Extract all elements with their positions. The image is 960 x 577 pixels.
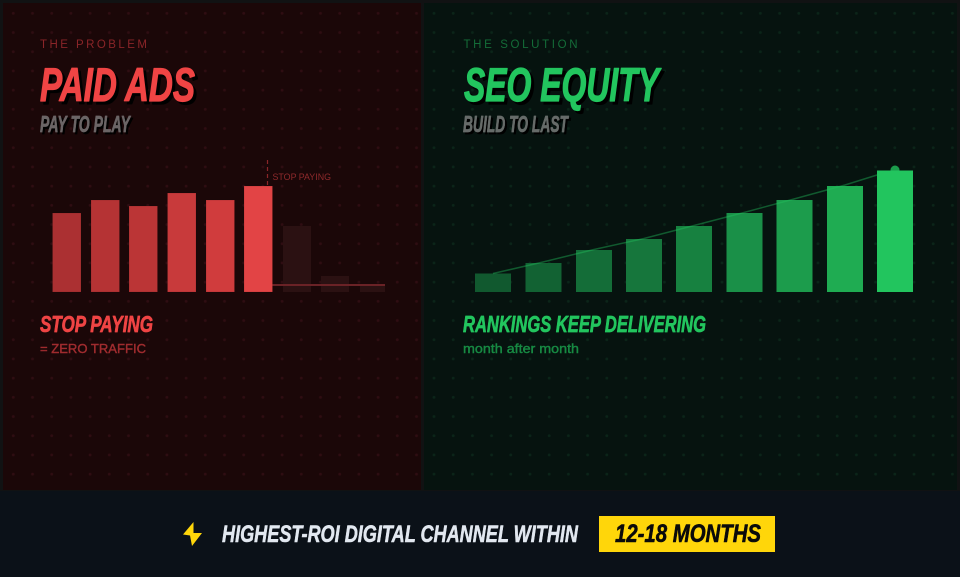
banner text: HIGHEST-ROI DIGITAL CHANNEL WITHIN	[222, 521, 579, 548]
bar chart: paid traffic collapses	[52, 160, 385, 292]
stop paying label: STOP PAYING	[272, 172, 331, 183]
caption: zero traffic: = ZERO TRAFFIC	[40, 341, 146, 356]
growth trend line	[493, 175, 877, 274]
subheading: pay to play: PAY TO PLAY	[40, 111, 132, 137]
bar chart: seo growth	[475, 166, 913, 292]
heading: seo equity: SEO EQUITY	[467, 61, 664, 114]
bars	[475, 170, 913, 292]
heading: paid ads	[40, 58, 198, 114]
icon: lightning bolt	[183, 522, 202, 546]
bars after stopping	[283, 226, 385, 292]
callout: rankings keep delivering: RANKINGS KEEP DELIVERING	[463, 311, 706, 337]
panel: the problem	[3, 3, 421, 490]
heading: paid ads: PAID ADS	[43, 61, 198, 114]
panel: the solution	[424, 3, 957, 490]
heading: paid ads: PAID ADS	[40, 58, 195, 111]
banner: bottom bar	[0, 491, 960, 577]
caption: month after month: month after month	[463, 341, 579, 356]
badge: 12-18 months: 12-18 MONTHS	[615, 520, 761, 548]
stop marker	[266, 160, 268, 186]
subheading: pay to play	[40, 111, 134, 139]
zero traffic line	[272, 284, 385, 286]
heading: seo equity: SEO EQUITY	[464, 58, 661, 111]
peak dot	[890, 166, 900, 174]
eyebrow: the solution: THE SOLUTION	[464, 39, 578, 51]
subheading: build to last: BUILD TO LAST	[463, 111, 569, 137]
heading: seo equity	[464, 58, 664, 114]
eyebrow: the problem: THE PROBLEM	[40, 39, 147, 51]
badge: 12-18 months	[599, 516, 775, 552]
callout: stop paying: STOP PAYING	[40, 311, 153, 337]
subheading: build to last	[463, 111, 571, 139]
bars while paying	[52, 186, 272, 292]
subheading: pay to play: PAY TO PLAY	[42, 113, 134, 139]
subheading: build to last: BUILD TO LAST	[465, 113, 571, 139]
